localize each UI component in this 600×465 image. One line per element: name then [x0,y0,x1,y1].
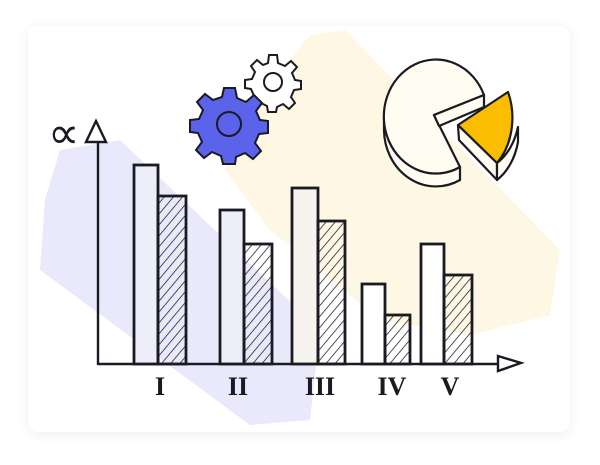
axis labels: III [305,372,335,401]
alpha symbol: ∝ [48,108,79,159]
axis labels: V [441,372,460,401]
card [28,26,570,432]
brush: blue [40,140,320,425]
axes [86,121,521,371]
icon: blue gear [190,88,268,164]
brush: yellow [225,30,560,335]
icon: white gear [245,55,301,112]
axis labels [155,372,460,401]
bar chart [134,165,472,364]
icon: pie chart [384,60,518,186]
axis labels: IV [378,372,407,401]
axis labels: I [155,372,165,401]
axis labels: II [228,372,248,401]
